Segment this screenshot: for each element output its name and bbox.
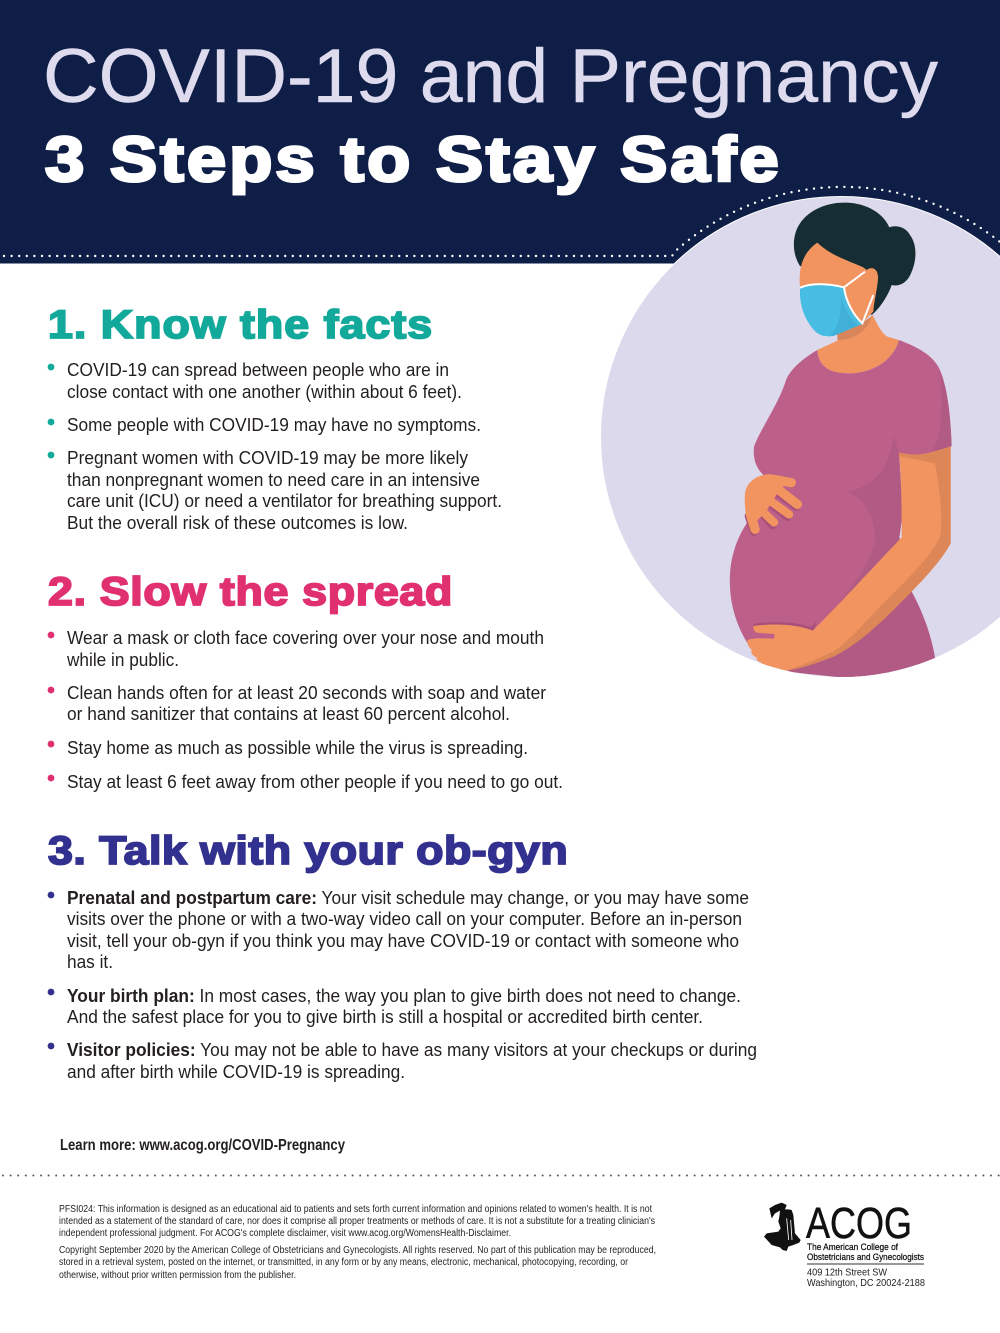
text 2: Stay at least 6 feet away from other people if you need to go out. bbox=[67, 772, 563, 792]
title: 3 Steps to Stay Safe bbox=[45, 124, 779, 195]
text 1: Pregnant women with COVID-19 may be more likely bbox=[67, 448, 468, 468]
bullets 2 bbox=[48, 632, 54, 781]
text 1: care unit (ICU) or need a ventilator for breathing support. bbox=[67, 491, 502, 511]
text 1: than nonpregnant women to need care in an intensive bbox=[67, 470, 480, 490]
text 1 bbox=[67, 360, 502, 533]
disclaimer text: otherwise, without prior written permission from the publisher. bbox=[59, 1270, 296, 1281]
heading 2: 2. Slow the spread bbox=[48, 569, 452, 613]
title: COVID-19 and Pregnancy bbox=[43, 34, 938, 119]
title bbox=[43, 34, 938, 195]
disclaimer text: Copyright September 2020 by the American College of Obstetricians and Gynecologists. All rights reserved. No part of this publication may be reproduced, bbox=[59, 1245, 656, 1256]
dress bbox=[730, 340, 952, 677]
neck and chest bbox=[817, 315, 899, 373]
text 3: Prenatal and postpartum care: Your visit schedule may change, or you may have some bbox=[67, 888, 749, 908]
disclaimer text: intended as a statement of the standard of care, nor does it comprise all proper treatments or methods of care. It is not a substitute for a treating clinician's bbox=[59, 1216, 655, 1227]
bullets 1 bbox=[48, 364, 54, 458]
disclaimer text: independent professional judgment. For ACOG's complete disclaimer, visit www.acog.org/WomensHealth-Disclaimer. bbox=[59, 1228, 511, 1239]
text 3: and after birth while COVID-19 is spreading. bbox=[67, 1062, 405, 1082]
organisation name: Obstetricians and Gynecologists bbox=[807, 1252, 924, 1263]
neck shadow bbox=[837, 316, 872, 340]
face mask bbox=[800, 272, 873, 336]
footer dotted line bbox=[3, 1174, 1000, 1176]
learn more link: Learn more: www.acog.org/COVID-Pregnancy bbox=[60, 1137, 345, 1154]
dress shading bbox=[787, 370, 952, 677]
disclaimer text: stored in a retrieval system, posted on the internet, or transmitted, in any form or by any means, electronic, mechanical, photocopying, recording, or bbox=[59, 1257, 629, 1268]
text 3: Visitor policies: You may not be able to have as many visitors at your checkups or during bbox=[67, 1040, 757, 1060]
arm bbox=[747, 447, 951, 671]
heading 1: 1. Know the facts bbox=[48, 302, 432, 346]
text 3: And the safest place for you to give birth is still a hospital or accredited birth center. bbox=[67, 1007, 703, 1027]
text 3: visit, tell your ob-gyn if you think you may have COVID-19 or contact with someone who bbox=[67, 931, 739, 951]
text 2: or hand sanitizer that contains at least 60 percent alcohol. bbox=[67, 704, 510, 724]
section 2: slow the spread bbox=[48, 569, 563, 792]
bullets 3 bbox=[48, 892, 54, 1049]
disclaimer text bbox=[59, 1204, 656, 1281]
heading 3: 3. Talk with your ob-gyn bbox=[48, 828, 568, 872]
text 2: Stay home as much as possible while the virus is spreading. bbox=[67, 738, 528, 758]
wordmark: ACOG bbox=[806, 1199, 912, 1248]
upper hand bbox=[745, 474, 797, 532]
header band bbox=[0, 0, 1000, 264]
text 1: Some people with COVID-19 may have no symptoms. bbox=[67, 415, 481, 435]
text 1: COVID-19 can spread between people who are in bbox=[67, 360, 449, 380]
text 2 bbox=[66, 628, 563, 792]
illustration: pregnant woman wearing a mask bbox=[600, 196, 1000, 678]
text 2: Clean hands often for at least 20 seconds with soap and water bbox=[67, 683, 546, 703]
arm shading bbox=[787, 447, 951, 671]
section 3: talk with your ob-gyn bbox=[48, 828, 757, 1082]
address: Washington, DC 20024-2188 bbox=[807, 1278, 925, 1289]
text 3: visits over the phone or with a two-way video call on your computer. Before an in-person bbox=[67, 909, 742, 929]
text 2: Wear a mask or cloth face covering over your nose and mouth bbox=[67, 628, 544, 648]
organisation name bbox=[807, 1242, 924, 1263]
text 3: Your birth plan: In most cases, the way you plan to give birth does not need to change. bbox=[67, 986, 741, 1006]
address bbox=[807, 1268, 925, 1289]
text 3: has it. bbox=[67, 952, 113, 972]
organisation name: The American College of bbox=[807, 1242, 898, 1253]
text 1: But the overall risk of these outcomes is low. bbox=[67, 513, 408, 533]
icon: mother and child bbox=[764, 1203, 801, 1251]
shadow above lower hand bbox=[754, 622, 816, 630]
text 2: while in public. bbox=[66, 650, 179, 670]
address: 409 12th Street SW bbox=[807, 1268, 888, 1278]
face bbox=[800, 243, 878, 323]
text 3 bbox=[67, 888, 757, 1082]
hair bbox=[794, 203, 915, 315]
text 1: close contact with one another (within about 6 feet). bbox=[67, 382, 462, 402]
dotted header border bbox=[4, 187, 1000, 256]
ACOG logo and address bbox=[764, 1199, 925, 1289]
disclaimer text: PFSI024: This information is designed as an educational aid to patients and sets forth current information and opinions related to women's health. It is not bbox=[59, 1204, 652, 1215]
section 1: know the facts bbox=[48, 302, 502, 533]
